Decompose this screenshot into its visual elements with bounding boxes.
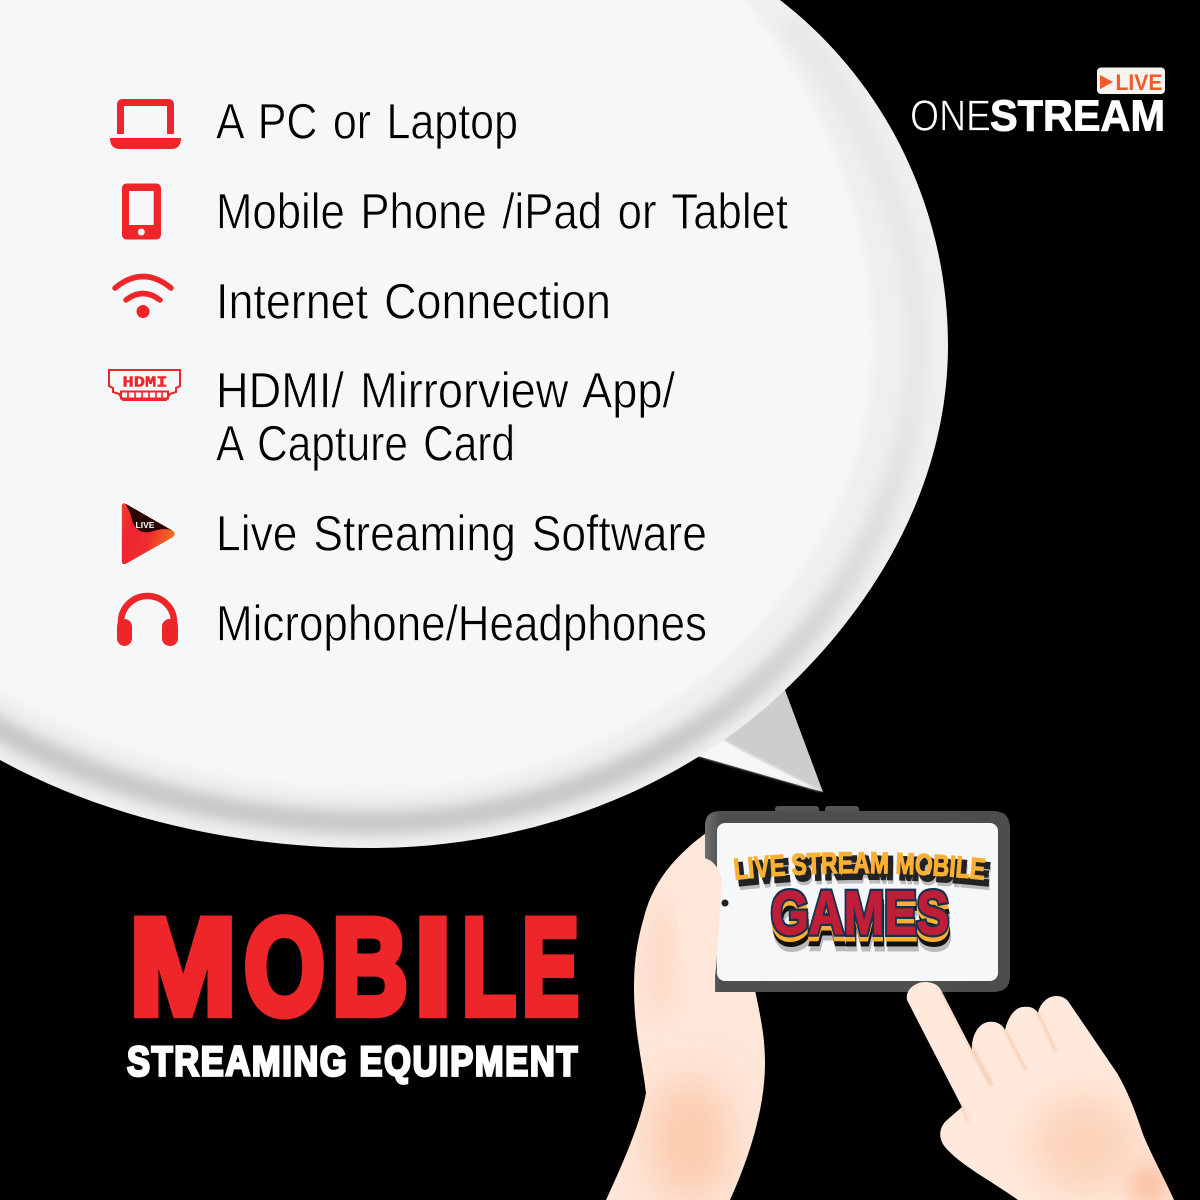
item: internet	[115, 274, 611, 330]
label: microphone: Microphone/Headphones	[216, 596, 707, 652]
title: MOBILE: I	[414, 891, 452, 1044]
phone screen	[717, 823, 998, 981]
game logo: LIVE STREAM MOBILE: LIVE STREAM MOBILE	[734, 852, 986, 880]
phone side buttons	[775, 806, 859, 814]
icon: live play: LIVE	[136, 520, 155, 530]
left thumb	[675, 857, 722, 990]
game logo: GAMES: GAMES	[771, 879, 949, 947]
equipment list	[109, 94, 788, 652]
item: software	[121, 503, 707, 565]
title: MOBILE: B	[332, 891, 408, 1044]
game logo: LIVE STREAM MOBILE: LIVE STREAM MOBILE	[738, 854, 991, 887]
label: mobile phone: Mobile Phone /iPad or Tablet	[216, 184, 788, 240]
right hand	[900, 975, 1180, 1200]
camera	[722, 900, 728, 906]
logo badge: LIVE: LIVE	[1116, 70, 1162, 95]
title: MOBILE: L	[462, 891, 516, 1044]
subtitle: STREAMING EQUIPMENT	[127, 1038, 579, 1084]
game logo: LIVE STREAM MOBILE: LIVE STREAM MOBILE	[740, 860, 992, 890]
logo badge: LIVE	[1097, 68, 1165, 95]
item: PC or laptop	[110, 94, 518, 150]
icon: wifi	[115, 276, 171, 318]
phone	[705, 806, 1010, 992]
game logo: GAMES: GAMES	[773, 894, 951, 962]
game logo: GAMES: GAMES	[771, 879, 949, 947]
label: HDMI	[216, 362, 675, 472]
title: MOBILE	[130, 891, 579, 1044]
game logo: GAMES: GAMES	[772, 889, 950, 957]
item: HDMI	[109, 362, 675, 472]
logo wordmark: ONE	[910, 92, 991, 141]
game logo	[734, 852, 992, 962]
item: mobile phone	[122, 184, 788, 240]
title	[127, 891, 579, 1084]
title: MOBILE: E	[522, 891, 579, 1044]
bubble tail	[695, 690, 823, 792]
label: PC or laptop: A PC or Laptop	[216, 94, 518, 150]
icon: mobile phone	[122, 184, 161, 240]
left hand back	[606, 834, 765, 1200]
title: MOBILE: O	[244, 891, 325, 1044]
logo wordmark	[910, 92, 1165, 141]
bubble body	[0, 0, 1000, 860]
logo: OneStream Live	[910, 68, 1165, 141]
label: HDMI: A Capture Card	[216, 416, 515, 472]
icon: live play	[121, 503, 176, 565]
game logo: GAMES: GAMES	[771, 884, 949, 952]
item: microphone	[117, 596, 707, 652]
speech bubble	[0, 0, 1000, 860]
title: MOBILE: M	[130, 891, 236, 1044]
icon: HDMI	[109, 370, 180, 400]
icon: headphones	[117, 596, 178, 646]
phone body	[705, 811, 1010, 992]
game logo: GAMES	[771, 879, 951, 962]
label: software: Live Streaming Software	[216, 506, 707, 562]
illustration: hands holding phone	[606, 806, 1174, 1200]
icon: laptop	[110, 99, 181, 149]
label: internet: Internet Connection	[216, 274, 611, 330]
icon: HDMI: HDMI	[122, 374, 168, 392]
label: HDMI: HDMI/ Mirrorview App/	[216, 362, 675, 418]
logo wordmark: STREAM	[990, 92, 1165, 141]
